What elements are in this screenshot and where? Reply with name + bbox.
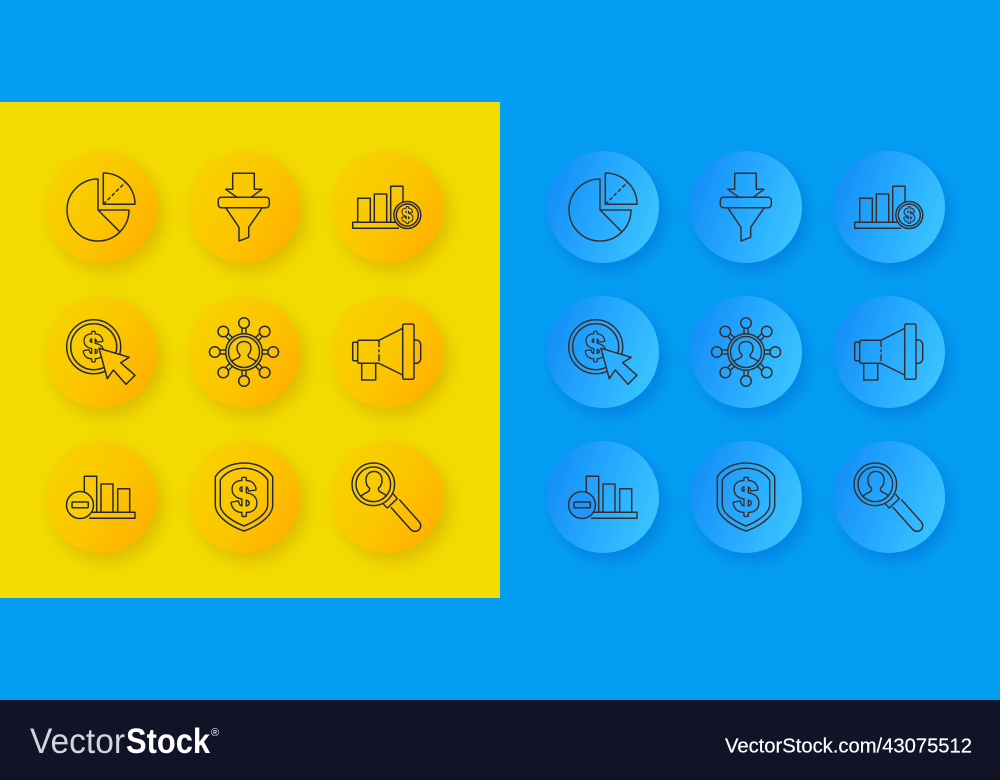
footer image id: VectorStock.com/43075512 (725, 736, 972, 758)
icon: shield with dollar: $ (733, 471, 759, 522)
icon: pie chart (569, 173, 637, 241)
icon: bar chart with dollar coin (353, 186, 421, 228)
icon: funnel with arrow (218, 173, 269, 241)
panel: blue icon set (547, 151, 945, 553)
icon: magnifier with person (854, 463, 923, 531)
icon: bar chart with dollar coin: $ (402, 205, 413, 226)
icon: dollar coin with cursor (67, 320, 135, 384)
yellow square (0, 102, 500, 598)
button: dollar click (547, 296, 659, 408)
button: bars with minus (547, 441, 659, 553)
button: sales funnel (188, 151, 300, 263)
footer bar (0, 700, 1000, 780)
icon: dollar coin with cursor: $ (84, 327, 103, 366)
footer logo: ® (211, 727, 219, 739)
button: sales funnel (690, 151, 802, 263)
button: bars with minus (45, 441, 157, 553)
button: pie chart (45, 151, 157, 263)
icon: bar chart with dollar coin: $ (402, 205, 413, 226)
button: user search (833, 441, 945, 553)
button: dollar shield (188, 441, 300, 553)
icon: dollar coin with cursor (569, 320, 637, 384)
icon: dollar coin with cursor: $ (586, 327, 605, 366)
button: user search (331, 441, 443, 553)
icon: dollar coin with cursor: $ (84, 327, 103, 366)
button: bars with dollar (331, 151, 443, 263)
icon: funnel with arrow (720, 173, 771, 241)
button: bars with dollar (833, 151, 945, 263)
icon: bar chart with dollar coin (855, 186, 923, 228)
icon: user network (209, 318, 279, 386)
icon: shield with dollar: $ (231, 471, 257, 522)
icon: bar chart with dollar coin: $ (904, 205, 915, 226)
button: people network (188, 296, 300, 408)
button: dollar click (45, 296, 157, 408)
icon: shield with dollar (717, 463, 775, 531)
icon: shield with dollar: $ (733, 471, 759, 522)
icon: user network (711, 318, 781, 386)
icon: megaphone (855, 324, 923, 380)
icon: pie chart (67, 173, 135, 241)
icon: shield with dollar: $ (231, 471, 257, 522)
footer logo (30, 722, 219, 761)
icon: bar chart with minus (568, 476, 637, 518)
button: dollar shield (690, 441, 802, 553)
button: megaphone (331, 296, 443, 408)
button: people network (690, 296, 802, 408)
footer logo: Stock (126, 722, 210, 761)
icon: bar chart with minus (66, 476, 135, 518)
footer logo: Vector (30, 722, 125, 761)
icon: megaphone (353, 324, 421, 380)
icon: bar chart with dollar coin: $ (904, 205, 915, 226)
icon: magnifier with person (352, 463, 421, 531)
icon: dollar coin with cursor: $ (586, 327, 605, 366)
icon: shield with dollar (215, 463, 273, 531)
panel: yellow icon set (0, 102, 500, 598)
button: pie chart (547, 151, 659, 263)
button: megaphone (833, 296, 945, 408)
